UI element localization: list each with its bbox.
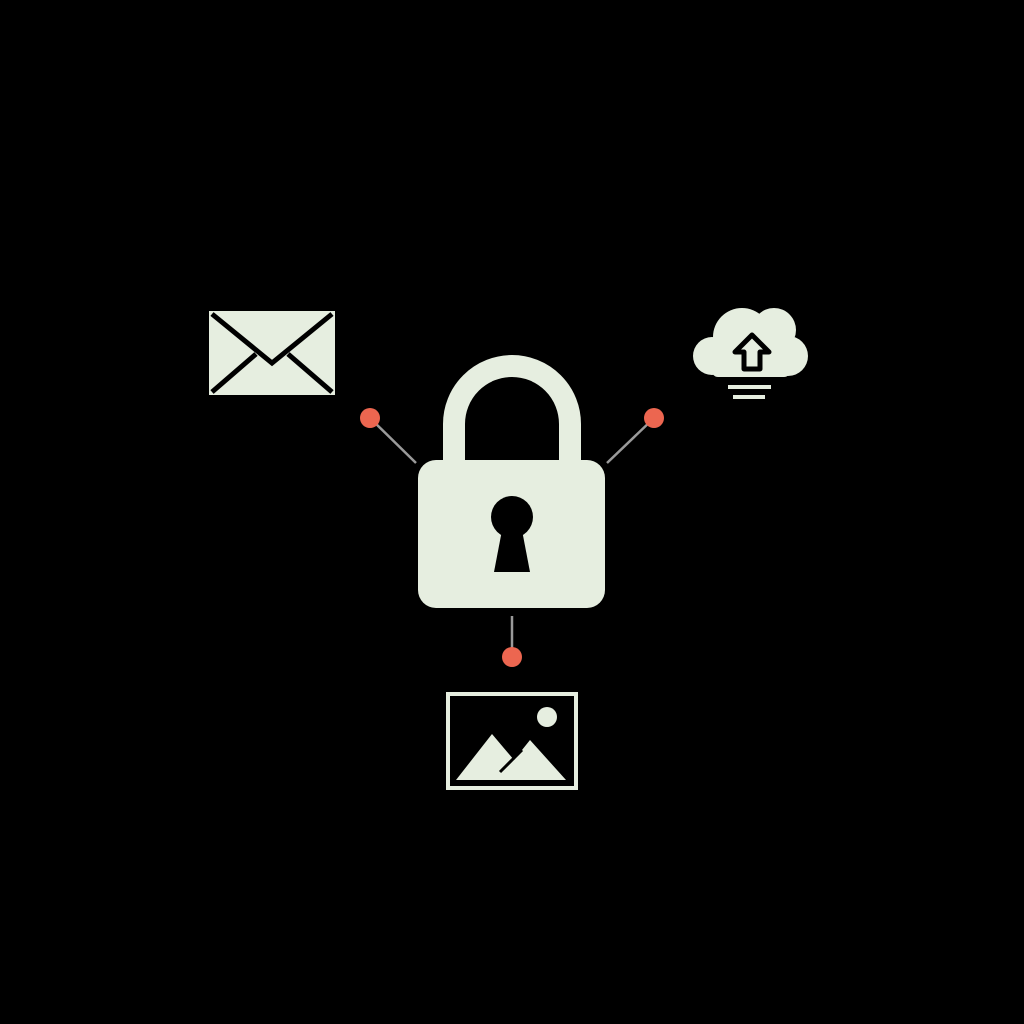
icon: cloud upload	[693, 308, 808, 397]
connector: envelope to lock	[360, 408, 416, 463]
icon: image frame	[448, 694, 576, 788]
connector: cloud to lock	[607, 408, 664, 463]
icon: envelope	[209, 311, 335, 395]
icon: padlock	[418, 366, 605, 608]
connector: lock to image	[502, 616, 522, 667]
